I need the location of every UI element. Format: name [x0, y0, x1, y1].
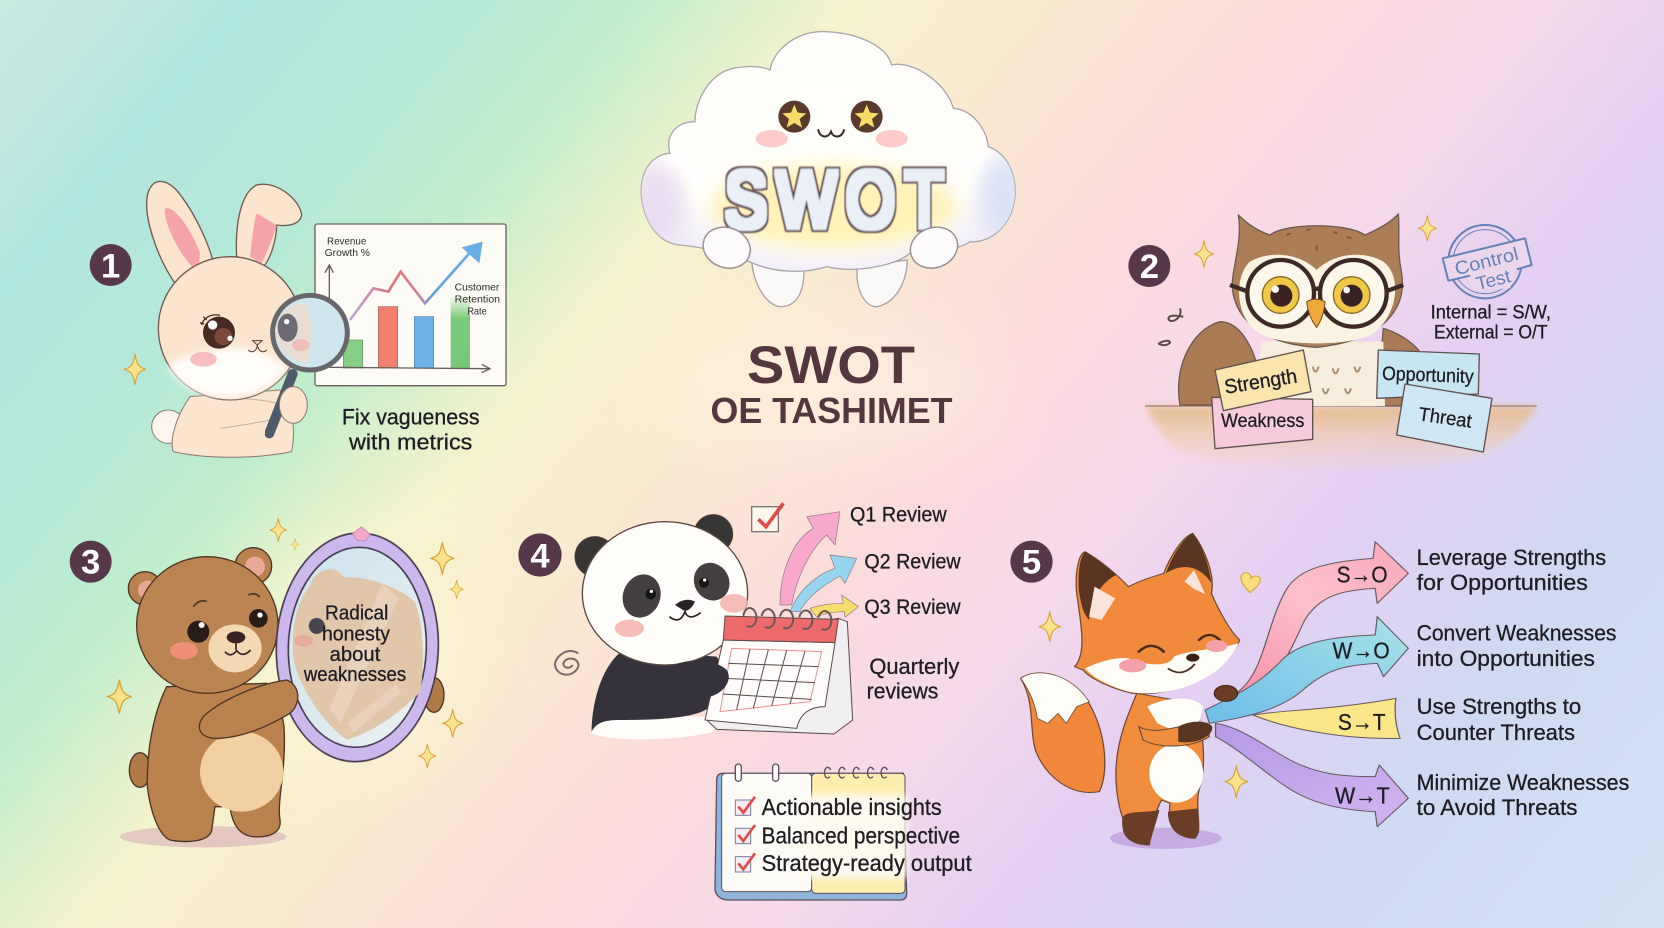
metrics chart: Retention [455, 295, 500, 306]
metrics chart: Revenue [327, 237, 367, 248]
table [1145, 406, 1537, 468]
metrics chart: Growth % [325, 248, 370, 259]
mirror text: weaknesses [303, 664, 406, 686]
metrics chart: Rate [467, 307, 487, 318]
ribbon arrow: W to O [1205, 617, 1408, 723]
card: threat: Threat [1417, 404, 1474, 433]
icon: sparkles [1194, 216, 1436, 267]
panda paw [663, 661, 729, 698]
mascot: cloud holding SWOT [630, 32, 1027, 307]
strategy text: convert [1417, 622, 1616, 671]
quarter labels: Q2 Review [864, 549, 961, 573]
bear character [128, 548, 444, 842]
mirror text: about [330, 644, 381, 666]
card: strength [1215, 350, 1311, 411]
strategy text: leverage: for Opportunities [1417, 571, 1588, 595]
panel 3: bear with mirror [70, 518, 463, 847]
ribbon labels: S→O [1337, 561, 1388, 588]
checkbox [752, 503, 783, 532]
strategy text: counter: Counter Threats [1417, 721, 1575, 745]
metrics chart: Customer [455, 283, 500, 294]
notebook checklist [715, 764, 972, 900]
notebook checklist: Strategy-ready output [762, 850, 972, 876]
icon: swirl [555, 651, 578, 675]
quarter labels: Q3 Review [864, 595, 961, 619]
mirror [272, 524, 442, 764]
caption: internal external: Internal = S/W, [1431, 302, 1551, 323]
fox paw [1214, 685, 1238, 701]
strategy text: counter: Use Strengths to [1417, 695, 1581, 719]
caption: quarterly reviews [867, 654, 959, 703]
strategy text: counter [1417, 695, 1581, 745]
quarter labels: Q1 Review [850, 503, 947, 527]
caption: internal external: External = O/T [1434, 322, 1548, 343]
stamp: control test: Control [1452, 243, 1520, 279]
stamp: control test: Test [1474, 265, 1513, 294]
icon: sparkles [107, 518, 463, 768]
strategy text: leverage [1417, 546, 1606, 595]
ribbon labels: S→T [1338, 709, 1386, 735]
owl character [1179, 214, 1419, 406]
ribbon labels: W→T [1335, 782, 1390, 809]
number badge 1: 1 [101, 247, 120, 285]
caption: fix vagueness: with metrics [348, 430, 472, 455]
ribbon labels: W→O [1332, 637, 1390, 664]
panel 5: fox with TOWS ribbons [1010, 533, 1629, 849]
title [710, 336, 952, 431]
checklist boxes [735, 797, 755, 872]
fox character [1021, 533, 1240, 845]
ribbon arrow: S to T [1253, 698, 1400, 739]
number badge 1 [90, 244, 132, 286]
caption: internal external [1431, 302, 1551, 343]
number badge 4: 4 [530, 537, 550, 575]
panda character [575, 515, 748, 739]
number badge 2: 2 [1140, 248, 1159, 286]
panel 2: owl with SWOT cards [1128, 214, 1551, 468]
card: strength: Strength [1223, 365, 1299, 399]
card: weakness: Weakness [1221, 411, 1304, 432]
icon: sparkle [124, 354, 146, 384]
strategy text: minimize: to Avoid Threats [1417, 796, 1577, 820]
ribbon arrow: W to T [1216, 723, 1408, 827]
caption: fix vagueness: Fix vagueness [342, 405, 480, 430]
panel 4: panda with calendar and notebook [518, 503, 972, 900]
number badge 2 [1128, 245, 1170, 287]
bear arm [199, 680, 298, 739]
strategy text: convert: into Opportunities [1417, 647, 1595, 671]
number badge 4 [518, 533, 562, 577]
arrows: quarterly [780, 512, 858, 617]
strategy text: minimize [1417, 771, 1629, 820]
cloud legs [752, 260, 907, 307]
mirror text: Radical [325, 602, 388, 624]
mirror text: honesty [322, 624, 390, 646]
title: OE TASHIMET [710, 390, 952, 431]
notebook checklist: Actionable insights [762, 794, 942, 820]
stamp: control test [1443, 225, 1532, 298]
number badge 3 [70, 541, 112, 583]
title: SWOT [747, 336, 915, 395]
mirror text [303, 602, 406, 686]
ribbon arrow: S to O [1238, 542, 1408, 698]
ribbon labels [1332, 561, 1390, 809]
icon: magnifying glass [269, 295, 347, 433]
quarter labels [850, 503, 961, 619]
caption: quarterly reviews: reviews [867, 678, 938, 703]
cloud lettering: SWOT [725, 157, 943, 244]
panel 1: rabbit with metrics chart [90, 181, 506, 457]
rabbit character [147, 181, 302, 457]
metrics chart [315, 224, 506, 386]
notebook checklist: Balanced perspective [762, 822, 960, 848]
cloud body [641, 32, 1015, 271]
card: threat [1397, 384, 1492, 452]
cloud hands [697, 221, 963, 275]
strategy text: leverage: Leverage Strengths [1417, 546, 1606, 570]
caption: quarterly reviews: Quarterly [869, 654, 959, 679]
number badge 5 [1010, 541, 1053, 583]
caption: fix vagueness [342, 405, 480, 455]
card: weakness [1212, 397, 1313, 449]
icon: sparkles and heart [1039, 573, 1260, 798]
card: opportunity: Opportunity [1382, 364, 1474, 388]
card: opportunity [1377, 350, 1479, 398]
number badge 5: 5 [1022, 544, 1041, 582]
calendar [705, 608, 853, 734]
icon: squiggles [1158, 308, 1183, 345]
number badge 3: 3 [81, 544, 100, 582]
cloud face [756, 101, 908, 147]
